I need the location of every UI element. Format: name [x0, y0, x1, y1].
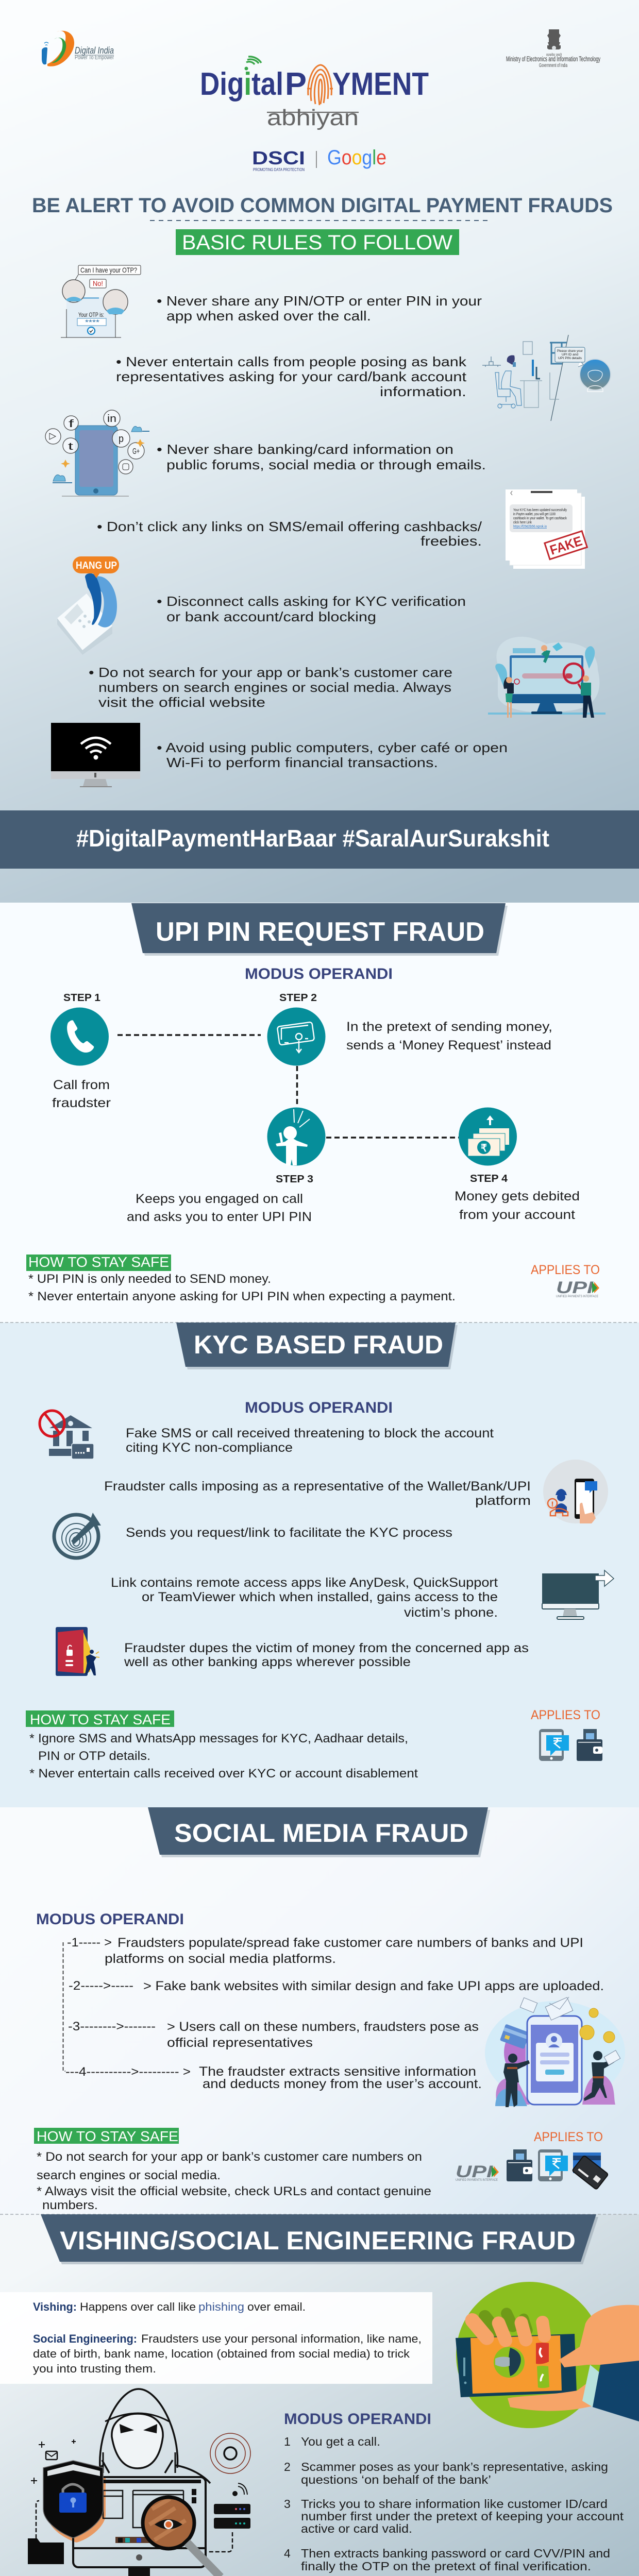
icon: fake SMS stamp: https://f29d2b56.ngrok.io — [513, 525, 547, 529]
applies to: UPI, wallet, phone, card: UNIFIED PAYMENTS INTERFACE — [456, 2179, 498, 2182]
step list: social media: -3-------->------- — [68, 2020, 156, 2033]
how to stay safe: social media: * Always visit the official website, check URLs and contact genuine — [37, 2184, 431, 2198]
icon: fake SMS stamp — [506, 489, 587, 569]
logo: DSCI and Google: Google — [327, 146, 386, 169]
numbered list: vishing: Scammer poses as your bank’s representative, asking — [301, 2460, 608, 2473]
text: KYC step 4: or TeamViewer which when installed, gains access to the — [142, 1590, 498, 1604]
heading ribbon: UPI PIN request fraud — [131, 903, 508, 956]
icon: monitor with remote arrow — [542, 1570, 614, 1619]
how to stay safe: social media: numbers. — [42, 2198, 98, 2212]
numbered list: vishing — [284, 2435, 624, 2576]
text: rule 2: information. — [380, 384, 466, 399]
step list: social media: > Users call on these numbers, fraudsters pose as — [167, 2020, 479, 2034]
logo: DSCI and Google — [252, 146, 386, 172]
definitions panel: phishing — [198, 2300, 244, 2313]
step list: social media: official representatives — [167, 2036, 313, 2050]
numbered list: vishing: Then extracts banking password or card CVV/PIN and — [301, 2547, 610, 2560]
applies to: UPI, wallet, phone, card: UPI — [456, 2162, 493, 2181]
numbered list: vishing: You get a call. — [301, 2435, 380, 2448]
how to stay safe: social media: HOW TO STAY SAFE — [37, 2128, 178, 2144]
how to stay safe: KYC: * Never entertain calls received over KYC or account disablement — [29, 1767, 418, 1781]
text: KYC step 1 — [126, 1426, 494, 1455]
step list: social media: The fraudster extracts sensitive information — [199, 2064, 476, 2079]
icon: OTP conversation: Your OTP is: — [78, 311, 104, 318]
how to stay safe: UPI — [26, 1254, 456, 1303]
definitions panel: date of birth, bank name, location (obtained from social media) to trick — [33, 2347, 410, 2360]
how to stay safe: KYC: HOW TO STAY SAFE — [30, 1711, 171, 1727]
text: rule 3: • Never share banking/card information on — [157, 442, 453, 457]
text: rule 3: public forums, social media or through emails. — [166, 457, 486, 472]
text: KYC step 3: Sends you request/link to facilitate the KYC process — [126, 1526, 452, 1540]
applies to: UPI, wallet, phone, card: APPLIES TO — [534, 2130, 603, 2144]
icon: phone with social media bubbles: p — [119, 433, 124, 445]
icon: OTP conversation: **** — [85, 318, 100, 326]
illustration: fraudsters and phone — [485, 1997, 625, 2107]
step 3: STEP 3 — [276, 1174, 313, 1185]
logo: DSCI and Google: PROMOTING DATA PROTECTION — [253, 167, 305, 172]
text: rule 4: freebies. — [421, 533, 482, 549]
heading: modus operandi: MODUS OPERANDI — [284, 2411, 431, 2428]
heading: modus operandi: MODUS OPERANDI — [245, 1399, 393, 1416]
step 4 — [455, 1108, 580, 1222]
icon: fraudster calling phone — [543, 1460, 608, 1523]
text: rule 3 — [157, 442, 486, 472]
definitions panel: Happens over call like — [80, 2300, 196, 2313]
logo: Digital India: Power To Empower — [75, 54, 114, 61]
text: rule 7: • Avoid using public computers, cyber café or open — [157, 740, 508, 755]
step 2: sends a ‘Money Request’ instead — [346, 1038, 551, 1053]
logo: Digital Payment Abhiyan: P — [285, 66, 307, 102]
step 1: Call from — [53, 1078, 110, 1092]
definitions panel: Vishing: — [33, 2300, 77, 2313]
numbered list: vishing: active or card valid. — [301, 2522, 412, 2535]
icon: man on call with fake bank agent — [482, 335, 611, 421]
text: rule 6: numbers on search engines or social media. Always — [98, 680, 451, 695]
text: rule 1 — [157, 293, 482, 324]
numbered list: vishing: Tricks you to share information like customer ID/card — [301, 2497, 608, 2511]
applies to: wallets — [531, 1708, 602, 1761]
logo: Digital India — [42, 31, 114, 66]
logo: Ministry of Electronics and Information Technology: Government of India — [539, 63, 567, 69]
heading ribbon: social media fraud — [148, 1807, 490, 1857]
definitions panel: Fraudsters use your personal information, like name, — [141, 2332, 422, 2345]
logo: Ministry of Electronics and Information Technology: सत्यमेव जयते — [546, 53, 562, 57]
heading ribbon: social media fraud: SOCIAL MEDIA FRAUD — [174, 1819, 468, 1848]
text: KYC step 4: Link contains remote access apps like AnyDesk, QuickSupport — [111, 1575, 498, 1590]
numbered list: vishing: 1 — [284, 2435, 291, 2448]
step 2: STEP 2 — [279, 992, 317, 1004]
text: rule 5: • Disconnect calls asking for KYC verification — [157, 594, 466, 609]
step 4: ₹ — [481, 1143, 487, 1154]
step 1: fraudster — [52, 1096, 111, 1110]
icon: OTP conversation: Can I have your OTP? — [80, 266, 137, 274]
applies to: UPI, wallet, phone, card — [456, 2130, 609, 2190]
how to stay safe: KYC: * Ignore SMS and WhatsApp messages for KYC, Aadhaar details, — [29, 1732, 408, 1745]
text: KYC step 2: Fraudster calls imposing as a representative of the Wallet/Bank/UPI — [104, 1479, 531, 1494]
icon: OTP conversation — [61, 265, 141, 337]
heading: modus operandi: MODUS OPERANDI — [36, 1911, 184, 1928]
logo: DSCI and Google: DSCI — [252, 147, 305, 168]
step 1 — [51, 992, 111, 1110]
how to stay safe: UPI: * UPI PIN is only needed to SEND money. — [28, 1272, 271, 1286]
icon: fingerprint with arrow — [54, 1513, 101, 1558]
text: rule 2 — [116, 354, 467, 399]
numbered list: vishing: 2 — [284, 2460, 291, 2473]
icon: phone with social media bubbles — [45, 410, 149, 496]
definitions panel: over email. — [247, 2300, 306, 2313]
text: rule 6: visit the official website — [98, 694, 265, 710]
icon: phone with social media bubbles: t — [68, 441, 74, 452]
step list: social media: Fraudsters populate/spread fake customer care numbers of banks and UPI — [117, 1936, 583, 1950]
step list: social media: and deducts money from the user’s account. — [203, 2077, 482, 2091]
text: rule 5: or bank account/card blocking — [166, 609, 376, 624]
icon: man on call with fake bank agent: Please share your — [557, 349, 583, 353]
step 3 — [127, 1108, 326, 1224]
icon: fake SMS stamp: Your KYC has been updated successfully — [513, 509, 567, 512]
text: rule 4: • Don’t click any links on SMS/email offering cashbacks/ — [97, 519, 482, 534]
how to stay safe: social media: search engines or social media. — [37, 2168, 221, 2182]
numbered list: vishing: 4 — [284, 2547, 291, 2560]
step 1: STEP 1 — [63, 992, 100, 1004]
step 2: In the pretext of sending money, — [346, 1020, 552, 1034]
definitions panel: you into trusting them. — [33, 2362, 156, 2375]
logo: Digital India: Digital India — [75, 45, 114, 56]
logo: Ministry of Electronics and Information Technology — [506, 29, 600, 69]
text: rule 2: • Never entertain calls from people posing as bank — [116, 354, 467, 369]
applies to: UPI: UNIFIED PAYMENTS INTERFACE — [556, 1295, 598, 1298]
text: KYC step 4: victim’s phone. — [404, 1605, 498, 1620]
heading: modus operandi: MODUS OPERANDI — [245, 965, 393, 982]
applies to: wallets: APPLIES TO — [531, 1708, 600, 1722]
text: KYC step 1: Fake SMS or call received threatening to block the account — [126, 1426, 494, 1440]
panel: UPI PIN request fraud — [0, 903, 639, 1323]
step 2 — [267, 992, 552, 1065]
step list: social media: -1----- > — [67, 1936, 112, 1950]
numbered list: vishing: finally the OTP on the pretext of final verification. — [301, 2560, 591, 2573]
icon: phone with social media bubbles: in — [107, 413, 116, 425]
icon: man on call with fake bank agent: UPI ID and — [562, 353, 578, 357]
step list: social media: ---4---------->--------- > — [65, 2065, 191, 2079]
applies to: UPI: UPI — [556, 1278, 594, 1297]
step list: social media: > Fake bank websites with similar design and fake UPI apps are uploaded. — [143, 1979, 604, 1993]
icon: phone with social media bubbles: f — [69, 418, 74, 430]
text: rule 5 — [157, 594, 466, 624]
heading ribbon: KYC based fraud — [176, 1323, 458, 1369]
text: rule 7: Wi-Fi to perform financial transactions. — [166, 755, 438, 770]
how to stay safe: social media: * Do not search for your app or bank’s customer care numbers on — [37, 2150, 422, 2164]
text: KYC step 5: well as other banking apps wherever possible — [124, 1655, 411, 1669]
text: KYC step 2: platform — [475, 1494, 531, 1508]
numbered list: vishing: questions ‘on behalf of the bank’ — [301, 2473, 491, 2486]
title: BE ALERT TO AVOID COMMON DIGITAL PAYMENT FRAUDS — [32, 194, 613, 217]
heading: basic rules: BASIC RULES TO FOLLOW — [182, 231, 452, 254]
text: KYC step 2 — [104, 1479, 531, 1508]
panel: social media fraud — [0, 1807, 639, 2214]
icon: fake SMS stamp: FAKE — [548, 533, 584, 558]
heading ribbon: KYC based fraud: KYC BASED FRAUD — [194, 1330, 443, 1359]
how to stay safe: social media — [34, 2128, 431, 2212]
numbered list: vishing: 3 — [284, 2497, 291, 2511]
icon: fake SMS stamp: in Paytm wallet, you will get 1100 — [513, 513, 556, 516]
how to stay safe: UPI: * Never entertain anyone asking for UPI PIN when expecting a payment. — [28, 1290, 456, 1303]
step 3: Keeps you engaged on call — [136, 1192, 303, 1206]
logo: Digital Payment Abhiyan: abhiyan — [267, 105, 359, 130]
icon: hang up phone — [57, 556, 119, 655]
heading ribbon: vishing: VISHING/SOCIAL ENGINEERING FRAUD — [60, 2226, 576, 2255]
icon: fingerprint A — [307, 65, 333, 105]
icon: fraudster calling phone: ! — [551, 1500, 554, 1508]
how to stay safe: KYC: PIN or OTP details. — [38, 1749, 150, 1763]
panel: vishing and social engineering fraud — [0, 2214, 639, 2576]
heading ribbon: UPI PIN request fraud: UPI PIN REQUEST FRAUD — [156, 917, 484, 947]
text: rule 6: • Do not search for your app or bank’s customer care — [89, 665, 452, 680]
step list: social media — [65, 1936, 604, 2091]
text: KYC step 1: citing KYC non-compliance — [126, 1440, 293, 1455]
icon: phone with social media bubbles: G+ — [132, 447, 140, 456]
step list: social media: -2----->----- — [69, 1979, 133, 1993]
illustration: hacker at computer with shield — [28, 2389, 250, 2576]
icon: fake SMS stamp: click here Link — [513, 521, 532, 524]
text: rule 1: app when asked over the call. — [166, 308, 371, 324]
icon: search on monitor — [488, 637, 606, 718]
text: KYC step 4 — [111, 1575, 498, 1620]
text: rule 2: representatives asking for your card/bank account — [116, 369, 467, 384]
how to stay safe: KYC — [26, 1710, 418, 1781]
numbered list: vishing: number first under the pretext of keeping your account — [301, 2510, 624, 2523]
icon: monitor with wifi — [51, 723, 140, 787]
text: rule 1: • Never share any PIN/OTP or enter PIN in your — [157, 293, 482, 309]
text: rule 6 — [89, 665, 452, 710]
icon: OTP conversation: No! — [93, 279, 103, 287]
text: KYC step 5 — [124, 1641, 529, 1669]
text: KYC step 5: Fraudster dupes the victim of money from the concerned app as — [124, 1641, 529, 1655]
illustration: hands holding phone with scam call — [456, 2282, 639, 2428]
applies to: UPI: APPLIES TO — [531, 1263, 600, 1277]
heading ribbon: vishing — [41, 2214, 598, 2264]
icon: man on call with fake bank agent: UPI PIN details — [558, 357, 582, 360]
step list: social media: platforms on social media platforms. — [105, 1952, 336, 1966]
flow connectors — [117, 1035, 459, 1138]
panel: KYC based fraud — [0, 1323, 639, 1807]
step 4: from your account — [459, 1208, 575, 1222]
applies to: UPI — [531, 1263, 600, 1298]
step 3: and asks you to enter UPI PIN — [127, 1210, 312, 1224]
hashtag banner: #DigitalPaymentHarBaar #SaralAurSurakshit — [76, 825, 549, 852]
icon: blocked bank — [40, 1411, 94, 1459]
icon: door on phone with thief — [56, 1627, 99, 1676]
how to stay safe: UPI: HOW TO STAY SAFE — [28, 1254, 169, 1270]
definitions panel: Social Engineering: — [33, 2332, 137, 2345]
definitions panel — [0, 2292, 432, 2384]
panel: header and basic rules — [0, 0, 639, 903]
icon: fake SMS stamp: cashback in your wallet. To get cashback — [513, 517, 567, 520]
logo: Digital Payment Abhiyan: YMENT — [332, 66, 429, 102]
step 4: Money gets debited — [455, 1189, 580, 1204]
hashtag banner — [0, 810, 639, 869]
icon: hang up phone: HANG UP — [76, 560, 117, 571]
text: rule 4 — [97, 519, 482, 549]
text: rule 7 — [157, 740, 508, 770]
step 4: STEP 4 — [470, 1173, 508, 1184]
logo: Digital Payment Abhiyan — [200, 57, 429, 130]
logo: Digital Payment Abhiyan: Digital — [200, 66, 283, 102]
